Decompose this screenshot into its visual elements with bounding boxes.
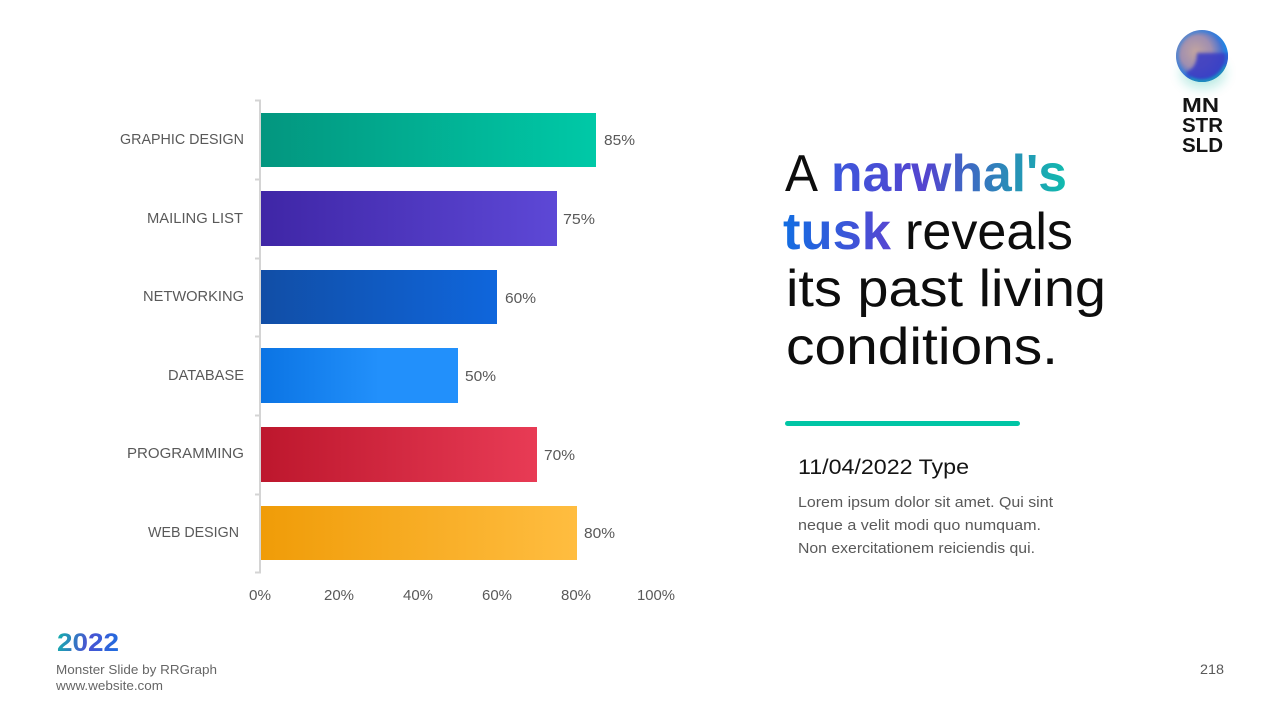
- bar: graphic design: GRAPHIC DESIGN: [120, 131, 244, 148]
- logo text: STR: [1182, 114, 1223, 137]
- heading: [783, 145, 1106, 376]
- footer credits: [55, 662, 217, 693]
- logo: [1176, 30, 1232, 157]
- body text: Non exercitationem reiciendis qui.: [798, 540, 1035, 557]
- axis labels: [249, 587, 675, 604]
- heading: tusk: [783, 203, 891, 261]
- heading: A: [785, 145, 818, 203]
- bar: database: DATABASE: [168, 367, 244, 384]
- axis labels: 80%: [561, 587, 591, 604]
- bar: programming: [127, 427, 575, 482]
- bar: database: [168, 348, 496, 403]
- bar: web design: 80%: [584, 525, 615, 542]
- axis labels: 100%: [637, 587, 675, 604]
- page number: 218: [1200, 661, 1224, 677]
- bar: networking: 60%: [505, 290, 536, 307]
- heading: conditions.: [786, 318, 1058, 376]
- logo text: SLD: [1182, 134, 1223, 157]
- bar: mailing list: MAILING LIST: [147, 210, 243, 227]
- logo text: MN: [1182, 94, 1219, 117]
- bar: networking: [143, 270, 536, 324]
- axis labels: 0%: [249, 587, 271, 604]
- bar: web design: WEB DESIGN: [148, 524, 239, 541]
- heading: its past living: [786, 260, 1106, 318]
- date and type: 11/04/2022 Type: [798, 456, 969, 479]
- axis: [255, 100, 260, 572]
- axis labels: 40%: [403, 587, 433, 604]
- bar: mailing list: [147, 191, 595, 246]
- bar: mailing list: 75%: [563, 211, 595, 228]
- bar: networking: NETWORKING: [143, 288, 244, 305]
- icon: gradient orb: [1176, 30, 1232, 88]
- body text: neque a velit modi quo numquam.: [798, 517, 1041, 534]
- bar: programming: 70%: [544, 447, 575, 464]
- body text: [798, 494, 1054, 557]
- bar: graphic design: [120, 113, 635, 167]
- accent divider: [785, 421, 1020, 426]
- bar: web design: [148, 506, 615, 560]
- bar: database: 50%: [465, 368, 496, 385]
- bar: programming: PROGRAMMING: [127, 445, 244, 462]
- footer credits: www.website.com: [55, 678, 163, 693]
- bar: graphic design: 85%: [604, 132, 635, 149]
- axis labels: 60%: [482, 587, 512, 604]
- heading: reveals: [905, 203, 1073, 261]
- body text: Lorem ipsum dolor sit amet. Qui sint: [798, 494, 1054, 511]
- axis labels: 20%: [324, 587, 354, 604]
- bar chart: [120, 100, 675, 604]
- footer credits: Monster Slide by RRGraph: [56, 662, 217, 677]
- logo text: [1182, 94, 1223, 157]
- heading: narwhal's: [831, 145, 1067, 203]
- footer year: 2022: [57, 629, 119, 657]
